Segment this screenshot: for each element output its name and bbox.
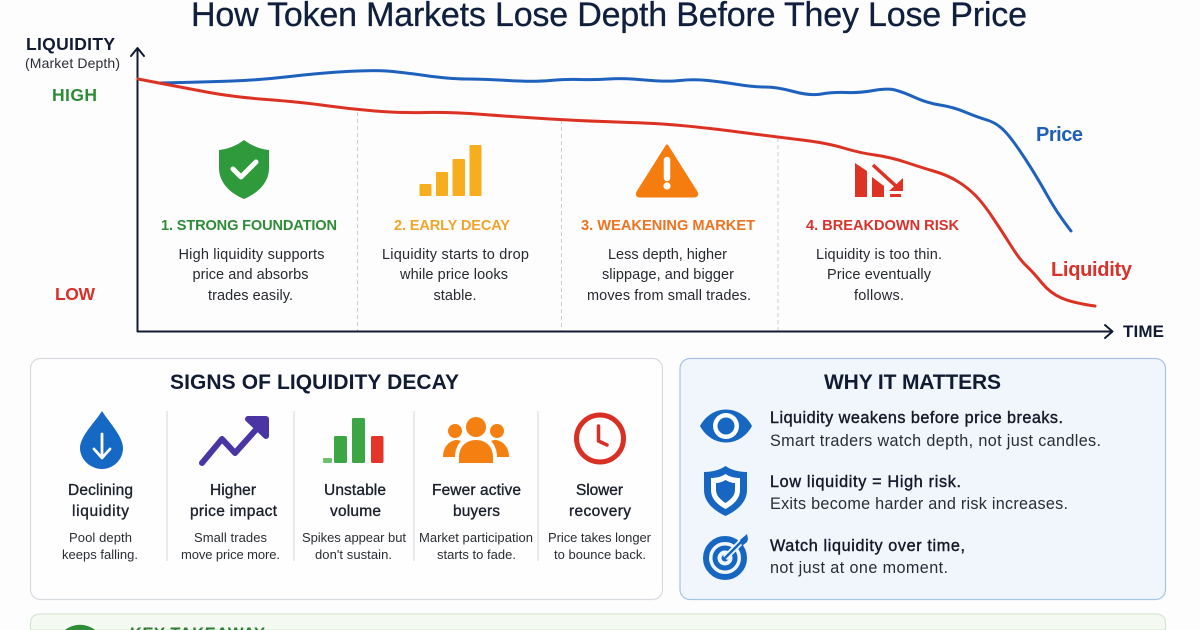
panel: key takeaway — [30, 614, 1166, 630]
label: low: LOW — [55, 284, 95, 304]
icon: people — [443, 417, 509, 463]
sign: fewer active buyers: starts to fade. — [437, 547, 516, 562]
point: low liquidity — [704, 466, 1068, 516]
point: watch over time: not just at one moment. — [770, 559, 948, 577]
point: liquidity weakens — [700, 409, 1101, 450]
icon: target — [706, 534, 748, 577]
sign: fewer active buyers: Market participation — [419, 530, 533, 545]
sign: unstable volume: volume — [330, 503, 381, 520]
sign: slower recovery: Slower — [576, 482, 623, 499]
label: high: HIGH — [52, 85, 97, 105]
description: follows. — [854, 288, 904, 304]
price line — [160, 71, 1071, 231]
description — [382, 247, 529, 304]
description — [587, 247, 751, 304]
panel heading: WHY IT MATTERS — [824, 371, 1001, 394]
sign: unstable volume — [302, 418, 406, 562]
sign: declining liquidity — [62, 411, 138, 562]
sign: slower recovery: to bounce back. — [554, 547, 646, 562]
point: low liquidity: Low liquidity = High risk. — [770, 473, 961, 491]
description: Price eventually — [827, 267, 932, 283]
y axis label: LIQUIDITY — [26, 34, 115, 54]
icon: green badge — [65, 625, 95, 630]
description: Less depth, higher — [608, 247, 727, 263]
sign: fewer active buyers — [419, 417, 533, 562]
sign: higher price impact: Small trades — [194, 530, 268, 545]
sign: higher price impact: Higher — [210, 482, 256, 499]
label: liquidity: Liquidity — [1051, 259, 1133, 281]
stage 4: breakdown risk — [806, 163, 959, 304]
heading: 3. WEAKENING MARKET — [581, 218, 755, 234]
panel: signs of liquidity decay — [30, 358, 662, 600]
point: liquidity weakens: Smart traders watch depth, not just candles. — [770, 432, 1101, 450]
sign: declining liquidity: keeps falling. — [62, 547, 138, 562]
point: low liquidity: Exits become harder and risk increases. — [770, 495, 1068, 513]
description: slippage, and bigger — [602, 267, 734, 283]
icon: rising arrow — [202, 419, 266, 463]
liquidity line — [138, 79, 1095, 306]
sign: unstable volume: Spikes appear but — [302, 530, 406, 545]
sign: unstable volume: Unstable — [324, 482, 386, 499]
stage 2: early decay — [382, 145, 529, 304]
sign: slower recovery: recovery — [569, 503, 631, 520]
sign: higher price impact: move price more. — [181, 547, 280, 562]
description: moves from small trades. — [587, 288, 751, 304]
panel: why it matters — [680, 358, 1166, 600]
point: watch over time: Watch liquidity over time, — [770, 537, 965, 555]
y axis label — [25, 34, 120, 71]
heading: 2. EARLY DECAY — [394, 218, 510, 234]
icon: uneven bars — [323, 418, 384, 463]
sign: slower recovery — [548, 415, 652, 562]
icon: eye — [700, 410, 752, 442]
description: stable. — [434, 288, 476, 304]
stage 3: weakening market — [581, 146, 755, 304]
point: watch over time — [706, 534, 965, 577]
icon: clock — [576, 415, 624, 462]
sign: declining liquidity: Pool depth — [69, 530, 132, 545]
stage dividers — [358, 112, 778, 331]
sign: fewer active buyers: Fewer active — [432, 482, 521, 499]
heading: 1. STRONG FOUNDATION — [161, 218, 337, 234]
sign: higher price impact: price impact — [190, 503, 278, 520]
description: Liquidity starts to drop — [382, 247, 529, 263]
sign: declining liquidity: liquidity — [72, 503, 129, 520]
icon: warning triangle — [637, 146, 697, 196]
axes — [131, 48, 1112, 338]
description: Liquidity is too thin. — [816, 247, 942, 263]
icon: green shield with check — [219, 140, 269, 199]
description: High liquidity supports — [178, 247, 324, 263]
label: time: TIME — [1123, 322, 1164, 341]
sign: fewer active buyers: buyers — [453, 503, 500, 520]
icon: water drop — [80, 411, 123, 469]
description: trades easily. — [208, 288, 293, 304]
sign: higher price impact — [181, 419, 280, 562]
stage 1: strong foundation — [161, 140, 337, 304]
icon: shield — [704, 466, 747, 516]
icon: rising bars — [420, 145, 482, 196]
sign: declining liquidity: Declining — [68, 482, 133, 499]
sign: slower recovery: Price takes longer — [548, 530, 652, 545]
heading: 4. BREAKDOWN RISK — [806, 218, 959, 234]
description: while price looks — [399, 267, 508, 283]
label: price: Price — [1036, 124, 1083, 146]
description: price and absorbs — [192, 267, 308, 283]
point: liquidity weakens: Liquidity weakens before price breaks. — [770, 409, 1063, 427]
panel heading: SIGNS OF LIQUIDITY DECAY — [170, 371, 459, 394]
y axis label: (Market Depth) — [25, 55, 120, 71]
description — [178, 247, 324, 304]
chart: liquidity and price over time — [25, 34, 1164, 341]
description — [816, 247, 942, 304]
sign: unstable volume: don't sustain. — [315, 547, 392, 562]
icon: falling bars with arrow — [855, 163, 903, 197]
